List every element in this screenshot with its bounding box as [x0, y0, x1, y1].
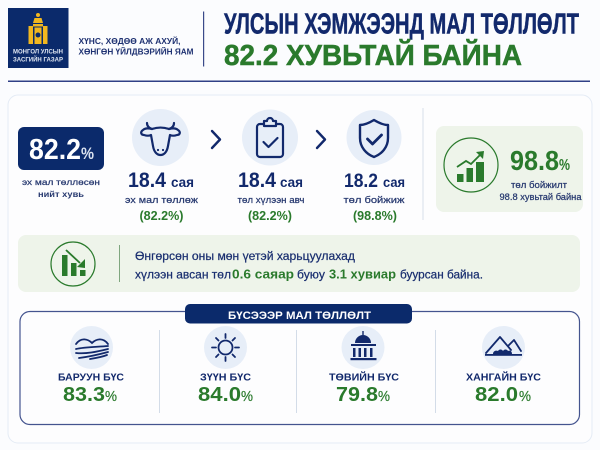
- region: khangai: %: [519, 388, 531, 405]
- ministry name: ХҮНС, ХӨДӨӨ АЖ АХУЙ,: [78, 37, 180, 46]
- icon: mountains: [485, 337, 522, 356]
- arrow: [212, 131, 220, 148]
- total percentage badge: эх мал төллөсөн: [22, 177, 100, 187]
- banner text: 3.1 хувиар: [329, 268, 396, 282]
- region: khangai: [466, 326, 541, 406]
- region: west: [58, 326, 124, 406]
- region: west: 83.3: [63, 383, 105, 406]
- step: offspring raised: [344, 110, 405, 223]
- ministry name: [78, 37, 194, 56]
- icon: falling bar chart: [51, 242, 95, 286]
- step: mother livestock birthing: (82.2%): [140, 209, 184, 223]
- card: survival rate 98.8%: төл бойжилт: [511, 180, 567, 190]
- ministry name: ХӨНГӨН ҮЙЛДВЭРИЙН ЯАМ: [78, 48, 194, 56]
- icon: clipboard: [257, 118, 283, 157]
- icon: rising bar chart: [444, 138, 498, 192]
- card: survival rate 98.8%: 98.8: [510, 145, 559, 176]
- total percentage badge: [18, 127, 104, 199]
- step: offspring received: (82.2%): [248, 209, 292, 223]
- title: 82.2 ХУВЬТАЙ БАЙНА: [224, 38, 522, 72]
- region: west: %: [105, 388, 117, 405]
- region: west: БАРУУН БҮС: [58, 372, 124, 384]
- region: central: %: [378, 388, 390, 405]
- step: offspring raised: төл бойжиж: [344, 195, 405, 206]
- card: survival rate 98.8%: %: [559, 157, 570, 174]
- icon: hills and fields: [76, 339, 108, 359]
- banner text: буюу: [297, 270, 325, 282]
- step: offspring received: [238, 110, 305, 223]
- icon: sun: [212, 334, 239, 361]
- card: survival rate 98.8%: [436, 126, 583, 212]
- main panel: [8, 95, 592, 443]
- banner text: [135, 251, 483, 282]
- banner: year-on-year comparison: [18, 235, 580, 292]
- region: east: 84.0: [198, 383, 241, 406]
- step: mother livestock birthing: эх мал төллөж: [125, 195, 199, 206]
- region: khangai: 82.0: [475, 383, 518, 406]
- logo: government of Mongolia: МОНГОЛ УЛСЫН: [13, 48, 63, 56]
- card: survival rate 98.8%: 98.8 хувьтай байна: [500, 192, 582, 202]
- arrow: [317, 131, 325, 148]
- banner text: хүлээн авсан төл: [135, 270, 231, 282]
- total percentage badge: нийт хувь: [38, 189, 84, 199]
- step: offspring raised: (98.8%): [353, 209, 397, 223]
- region: east: %: [241, 388, 253, 405]
- icon: cow head: [141, 123, 180, 155]
- icon: shield with check: [360, 120, 388, 157]
- step: mother livestock birthing: [125, 109, 199, 223]
- step: offspring raised: сая: [383, 174, 405, 190]
- step: mother livestock birthing: сая: [171, 174, 194, 190]
- region: east: [198, 326, 253, 406]
- total percentage badge: 82.2: [29, 134, 81, 166]
- heading tab: [185, 304, 412, 324]
- region: central: ТӨВИЙН БҮС: [329, 370, 399, 384]
- heading tab: БҮСЭЭЭР МАЛ ТӨЛЛӨЛТ: [228, 310, 371, 322]
- step: offspring received: төл хүлээн авч: [238, 195, 305, 206]
- header: [8, 8, 590, 82]
- logo: government of Mongolia: ЗАСГИЙН ГАЗАР: [13, 54, 64, 64]
- step: offspring received: 18.4: [238, 169, 276, 192]
- region: central: [329, 326, 399, 406]
- title: [224, 8, 579, 72]
- panel: regional birthing: [20, 304, 580, 424]
- icon: government building: [350, 331, 376, 360]
- banner text: 0.6 саяар: [232, 268, 294, 282]
- region: central: 79.8: [336, 383, 378, 406]
- logo: government of Mongolia: [8, 8, 68, 68]
- step: offspring raised: 18.2: [344, 171, 378, 192]
- total percentage badge: %: [81, 144, 94, 163]
- banner text: буурсан байна.: [400, 270, 483, 282]
- region: east: ЗҮҮН БҮС: [200, 372, 251, 384]
- step: mother livestock birthing: 18.4: [128, 169, 166, 192]
- step: offspring received: сая: [280, 174, 303, 190]
- region: khangai: ХАНГАЙН БҮС: [466, 370, 541, 384]
- banner text: Өнгөрсөн оны мөн үетэй харьцуулахад: [135, 251, 355, 263]
